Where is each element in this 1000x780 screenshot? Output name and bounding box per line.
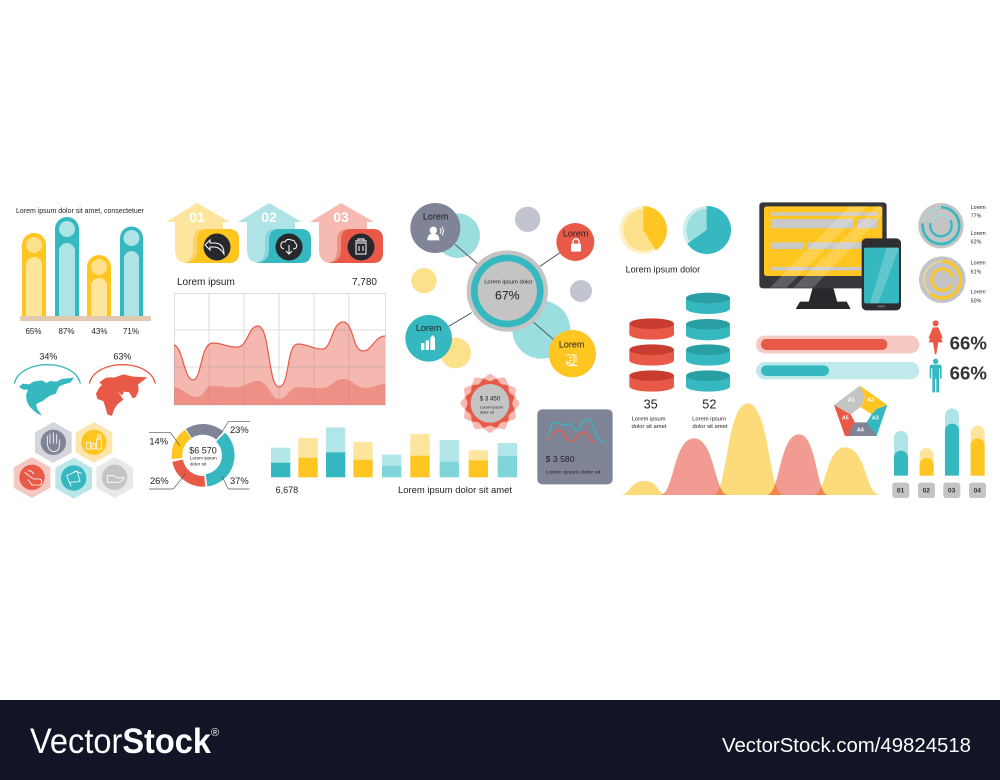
hexagon: people <box>76 422 112 463</box>
pentagon diagram: A3 <box>872 415 879 421</box>
hexagon: megaphone <box>55 458 92 499</box>
bar value labels <box>25 327 139 336</box>
hexagon: giving hand <box>96 457 133 498</box>
arrow 01: 01 <box>189 209 205 225</box>
badge: $ 3 450: dolor sit <box>480 410 495 415</box>
chart grid <box>174 293 386 405</box>
line series <box>174 322 385 387</box>
chart heading: Lorem ipsum <box>177 277 235 288</box>
panel: pies and cylinders <box>619 206 731 430</box>
cylinder labels: 35 <box>644 398 658 412</box>
cylinder labels: dolor sit amet <box>692 424 728 430</box>
bar value labels: 43% <box>91 327 108 336</box>
pentagon diagram: A2 <box>867 397 874 403</box>
lower area <box>174 379 385 405</box>
node: yellow: Lorem <box>559 340 584 350</box>
percent labels: 66% <box>950 333 987 354</box>
upper area <box>174 322 385 405</box>
small bar labels: 02 <box>923 488 930 495</box>
pentagon diagram: A4 <box>857 427 864 433</box>
label 63%: 63% <box>113 352 131 362</box>
icon: man <box>930 359 942 392</box>
pentagon diagram <box>834 386 887 436</box>
red cylinders <box>629 318 674 392</box>
donut segment 14% <box>177 434 188 458</box>
panel: network diagram <box>405 203 596 377</box>
progress bar red <box>756 336 919 353</box>
card: $ 3 580 <box>537 409 613 484</box>
footer logo: VectorStock <box>30 722 211 761</box>
donut centre text: dolor sit <box>190 462 207 467</box>
badge: $ 3 450: Lorem ipsum <box>480 405 504 410</box>
ring labels: Lorem <box>971 290 986 296</box>
chart value: 7,780 <box>352 277 377 288</box>
map: Eurasia and Africa <box>96 374 147 416</box>
pentagon diagram: A1 <box>848 397 855 403</box>
donut centre text: $6 570 <box>189 446 217 456</box>
ring labels: Lorem <box>971 231 986 237</box>
node: gray: Lorem <box>423 211 448 221</box>
badge: $ 3 450 <box>459 373 521 434</box>
small bar labels: 03 <box>948 488 956 495</box>
ring labels: 77% <box>971 214 982 220</box>
ring labels <box>971 205 986 305</box>
cylinder labels: 52 <box>702 398 716 412</box>
pentagon diagram: A5 <box>842 415 849 421</box>
hexagon: hand <box>35 422 72 463</box>
monitor <box>759 202 887 309</box>
stacked chart value: 6,678 <box>276 485 298 495</box>
donut labels: 14% <box>149 437 168 447</box>
panel: hexagon icons <box>14 422 133 499</box>
map: North America <box>19 378 74 416</box>
small bars <box>894 408 985 476</box>
ring labels: Lorem <box>971 261 986 267</box>
smartphone <box>862 238 901 310</box>
footer id: VectorStock.com/49824518 <box>722 735 971 757</box>
ring labels: 50% <box>971 299 982 305</box>
bell curves <box>620 403 880 495</box>
central circle <box>467 250 548 332</box>
cylinder labels: Lorem ipsum <box>692 417 726 423</box>
donut labels <box>149 425 249 486</box>
node: teal: Lorem <box>416 323 441 333</box>
ring labels: 61% <box>971 270 982 276</box>
donut labels: 26% <box>150 476 169 486</box>
small bar labels: 04 <box>974 488 981 495</box>
connectors <box>449 244 560 340</box>
donut segment 37% <box>207 437 228 480</box>
bar 71% <box>120 226 143 316</box>
bar 43% <box>87 255 111 316</box>
central circle: 67% <box>495 289 520 303</box>
panel: stacked bar chart <box>271 427 517 495</box>
pies caption: Lorem ipsum dolor <box>626 265 700 275</box>
cylinder labels <box>632 398 728 430</box>
donut centre text: Lorem ipsum <box>190 456 217 461</box>
label 34%: 34% <box>39 352 57 362</box>
progress bar teal <box>756 362 919 379</box>
bars <box>271 427 517 477</box>
donut labels: 23% <box>230 425 249 435</box>
arc red <box>89 365 155 384</box>
stacked chart caption: Lorem ipsum dolor sit amet <box>398 485 512 495</box>
panel: world maps <box>14 352 155 416</box>
bar chart base <box>20 316 151 321</box>
bar value labels: 65% <box>25 327 42 336</box>
panel: donut chart <box>149 422 250 489</box>
pie chart yellow <box>619 206 667 254</box>
bar 65% <box>22 233 46 316</box>
central circle: Lorem ipsum dolor <box>484 280 533 286</box>
panel: bell curves, pentagon and small bars <box>620 386 986 498</box>
pie chart teal <box>683 206 731 254</box>
node: yellow <box>549 330 596 377</box>
panel: numbered house arrows <box>166 203 383 263</box>
arrow 03 <box>310 203 383 263</box>
panel: rounded bar chart <box>16 206 151 336</box>
panel: area line chart <box>174 277 386 405</box>
bar value labels: 71% <box>123 327 139 336</box>
node: red <box>556 223 594 261</box>
ring labels: Lorem <box>971 205 986 211</box>
chart title: Lorem ipsum dolor sit amet, consectetuer <box>16 206 144 215</box>
card: $ 3 580: Lorem ipsum dolor sit <box>546 470 601 476</box>
bar 87% <box>55 217 79 316</box>
icon: woman <box>929 320 943 354</box>
percent labels <box>950 333 987 383</box>
card: $ 3 580: $ 3 580 <box>546 454 575 464</box>
teal cylinders <box>686 293 730 392</box>
ring labels: 62% <box>971 240 982 246</box>
donut labels: 37% <box>230 476 249 486</box>
hexagon: pointing hand <box>14 457 50 498</box>
footer banner <box>0 700 1000 780</box>
percent labels: 66% <box>950 362 987 383</box>
bar value labels: 87% <box>58 327 75 336</box>
node: teal <box>405 315 452 362</box>
small bar labels: 01 <box>897 488 905 495</box>
arrow 02 <box>238 203 311 263</box>
donut centre text <box>189 446 217 467</box>
arrow 02: 02 <box>261 209 277 225</box>
cylinder labels: dolor sit amet <box>632 424 667 430</box>
arrow 01 <box>166 203 239 263</box>
decorative circles <box>411 207 592 368</box>
cylinder labels: Lorem ipsum <box>632 417 666 423</box>
panel: devices and progress <box>756 202 987 392</box>
donut leader lines <box>149 422 250 489</box>
node: red: Lorem <box>563 228 588 238</box>
ring chart teal <box>918 203 964 248</box>
donut segment 23% <box>189 429 220 435</box>
node: gray <box>410 203 460 253</box>
donut segment 26% <box>178 461 205 481</box>
badge: $ 3 450: $ 3 450 <box>480 396 501 403</box>
registered mark: ® <box>211 727 219 739</box>
small bar labels <box>892 483 986 498</box>
arrow 03: 03 <box>333 209 349 225</box>
arc teal <box>14 365 80 384</box>
ring chart yellow <box>919 256 966 303</box>
